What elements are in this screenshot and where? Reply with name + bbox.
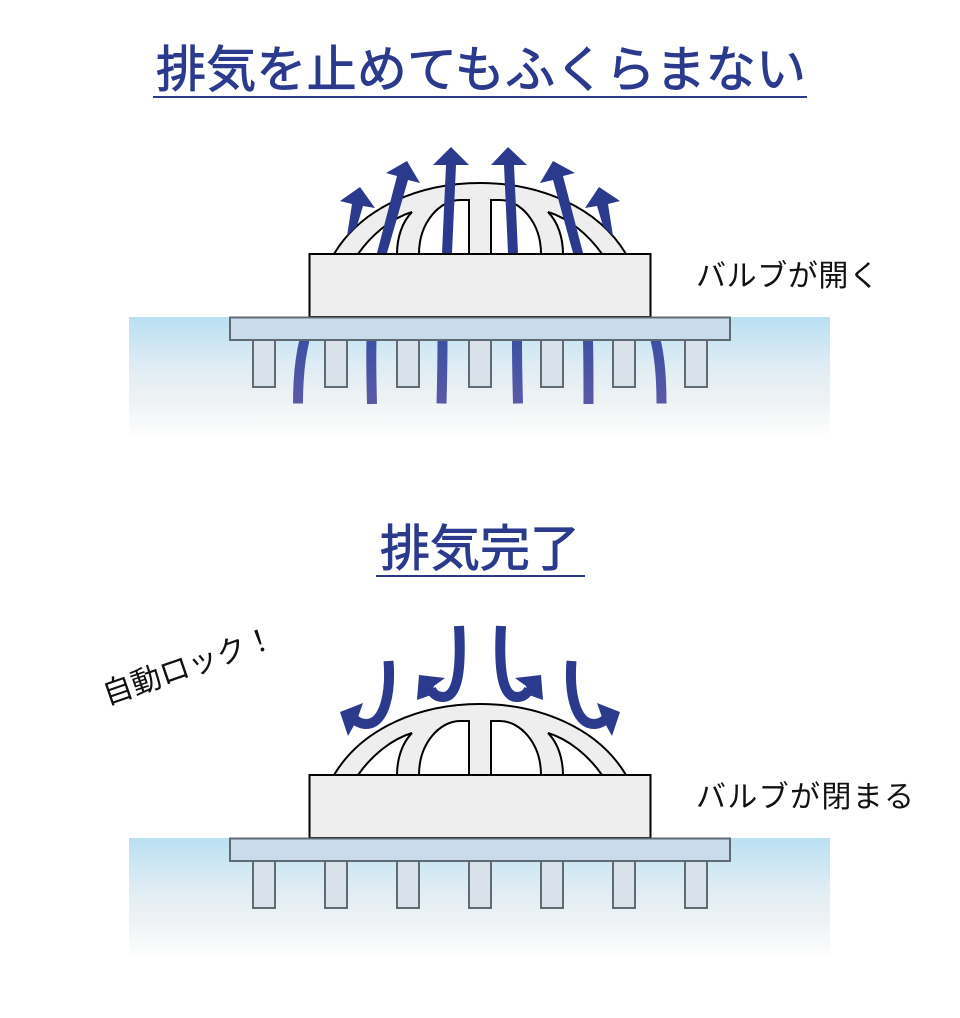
diagram: valve open <box>129 147 879 440</box>
callout: auto lock: 自動ロック！ <box>99 622 279 712</box>
title: second heading: 排気完了 <box>380 521 580 577</box>
valve dome <box>334 704 626 775</box>
valve dome <box>334 183 626 254</box>
box body <box>310 775 650 838</box>
box body <box>310 254 650 317</box>
plate <box>230 318 730 340</box>
diagram: valve closed <box>129 626 914 961</box>
title: top heading: 排気を止めてもふくらまない <box>156 42 806 98</box>
label: valve opens: バルブが開く <box>696 260 879 293</box>
teeth <box>253 340 707 387</box>
air flow below plate <box>298 340 662 404</box>
water background <box>129 317 830 440</box>
arrows: air blocked and deflected <box>340 626 620 736</box>
water background <box>129 838 830 961</box>
plate <box>230 838 730 861</box>
arrows: air escaping upward <box>340 147 620 253</box>
teeth <box>253 861 707 908</box>
label: valve closes: バルブが閉まる <box>696 781 914 814</box>
